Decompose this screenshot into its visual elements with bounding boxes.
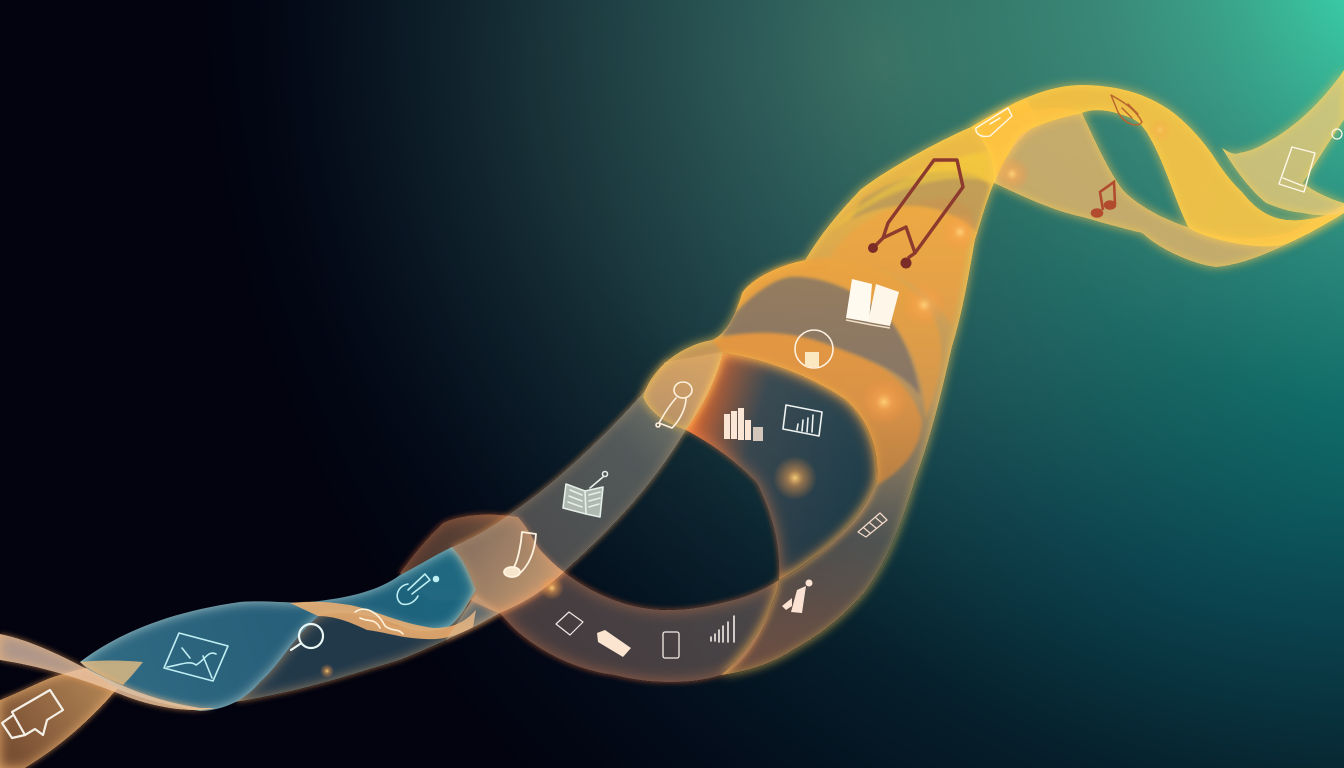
ribbon: top S band	[971, 85, 1344, 246]
icon: rolled paper	[597, 630, 631, 657]
icon: scroll	[504, 532, 536, 577]
glow spots	[320, 118, 1172, 678]
ribbon: lower right band	[994, 109, 1344, 267]
icon: coil	[1111, 95, 1142, 125]
icon: scoop	[397, 574, 438, 604]
icon: pencil figure	[782, 580, 812, 613]
icon: music note	[1092, 182, 1115, 216]
ribbon: orange patch behind bookmark	[830, 198, 972, 325]
icon: cup	[976, 108, 1012, 136]
icon: signal bars	[711, 616, 734, 642]
ribbon: warm highlight on blue band	[80, 660, 143, 685]
icon: small circle	[1332, 129, 1342, 139]
ribbon: grey patch behind book	[722, 277, 920, 395]
ribbon: pale crossing strand	[0, 634, 215, 710]
icon: bandage	[858, 513, 887, 537]
ribbon: dark lower strand	[235, 595, 500, 702]
ribbon: brown lower-left band	[0, 662, 143, 768]
icon: magnifier	[291, 624, 323, 650]
ribbon: orange S strand	[290, 602, 476, 639]
icon: microphone phone	[656, 382, 692, 428]
ribbon: orange band around globe	[712, 332, 922, 485]
icon: chart tablet	[783, 405, 822, 436]
icon: bar chart	[724, 408, 763, 441]
icon: tablet	[556, 612, 583, 635]
icon: bookmark	[868, 160, 963, 268]
icon: smartphone	[663, 632, 679, 658]
ribbon: orange loop	[400, 515, 564, 613]
ribbon: book band	[446, 352, 723, 640]
icon: open book with antenna	[563, 472, 608, 517]
icon: speech bubbles	[2, 690, 63, 738]
ribbon: yellow top sweep	[830, 150, 1005, 232]
ribbon: pale right strand	[1222, 70, 1344, 215]
ribbon: lower loop band	[500, 572, 779, 682]
icon: map picture	[164, 633, 228, 681]
ribbon: dark inner arc	[686, 353, 877, 580]
icon: open book white	[846, 279, 899, 328]
ribbon: blue band	[80, 547, 476, 711]
ribbon: large main band	[643, 100, 1040, 675]
icon: battery	[1279, 147, 1315, 192]
ribbon: grey patch behind bookmark	[850, 171, 990, 232]
icon: globe	[795, 330, 833, 368]
icon: squiggle	[355, 609, 403, 634]
ribbon: orange arc around book	[735, 258, 942, 420]
